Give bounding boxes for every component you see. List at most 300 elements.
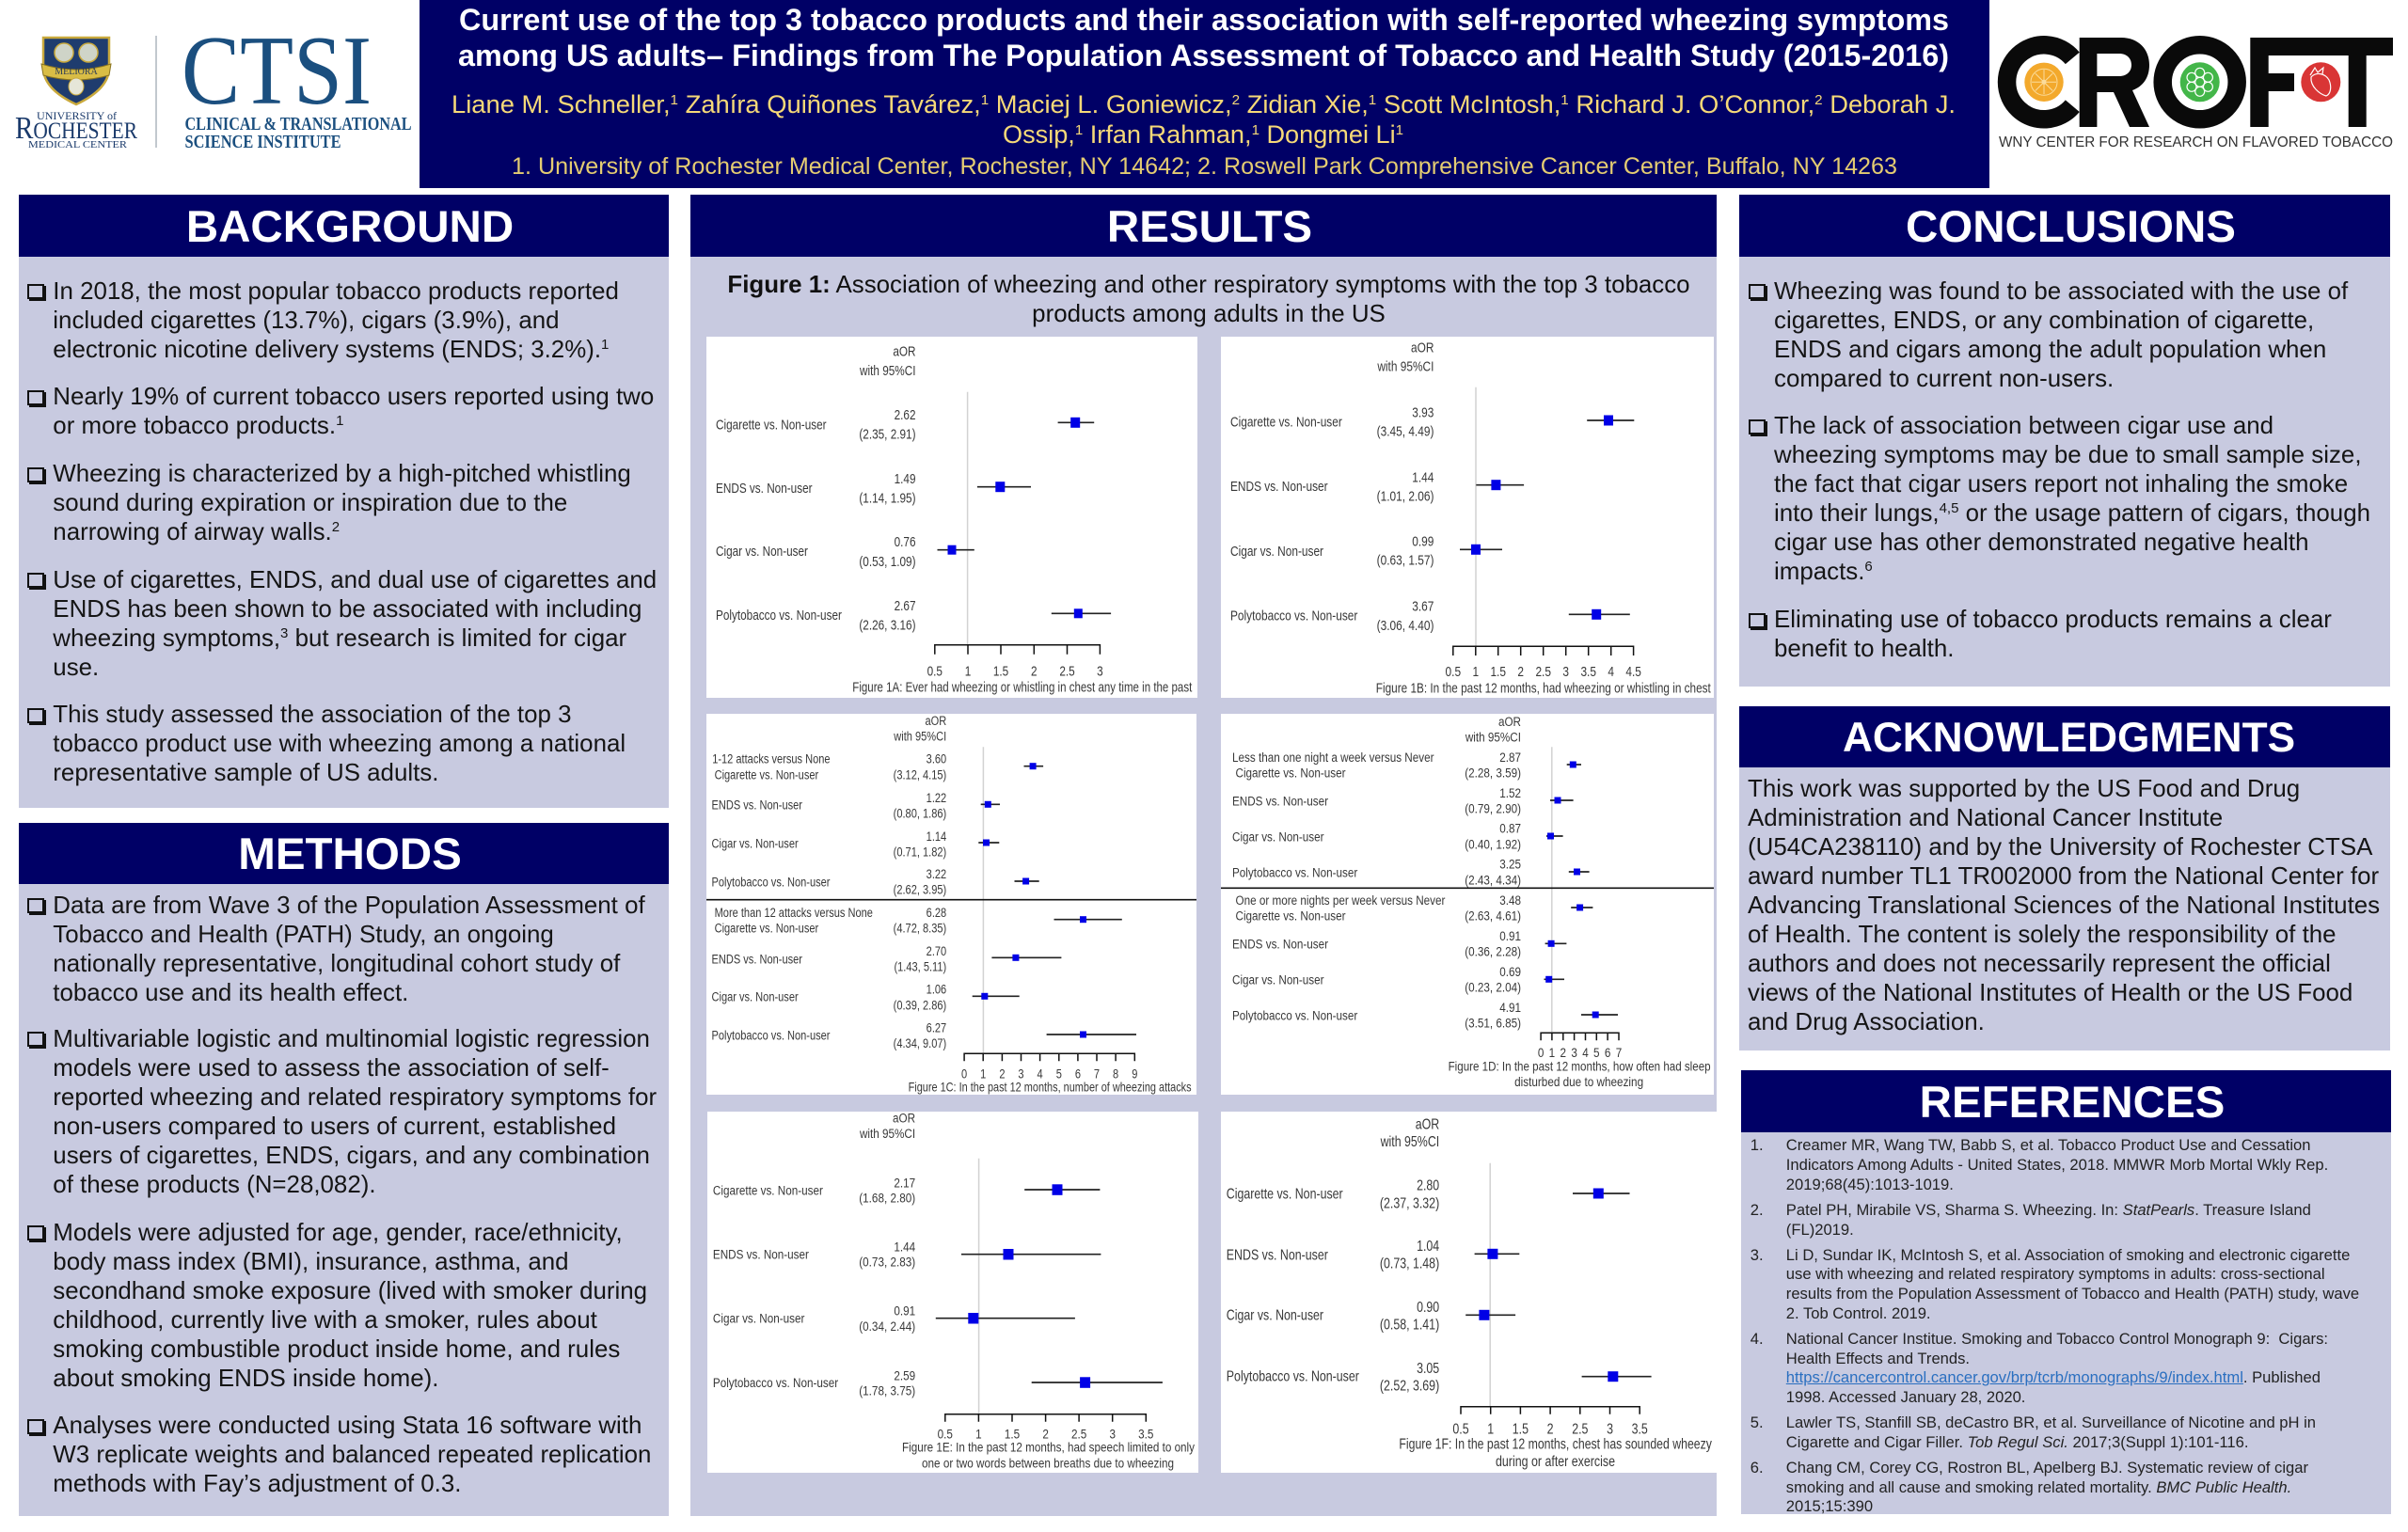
odds ratio values: (1.14, 1.95) xyxy=(859,490,916,506)
chart: figure 1A forest plot xyxy=(706,337,1197,698)
figure caption xyxy=(902,1440,1195,1470)
panel: references: 6. xyxy=(1751,1459,1764,1477)
odds ratio values: (2.28, 3.59) xyxy=(1465,765,1521,781)
text: methods bullet 3: Models were adjusted for age, gender, race/ethnicity, xyxy=(53,1220,623,1246)
x axis: 1 xyxy=(980,1066,986,1082)
odds ratio values: 2.62 xyxy=(895,407,916,422)
heading: conclusions xyxy=(1739,195,2390,257)
text: background bullet 2 xyxy=(27,384,654,439)
title xyxy=(458,3,1949,72)
x axis xyxy=(927,645,1103,679)
text: acknowledgments body: (U54CA238110) and by the University of Rochester CTSA xyxy=(1748,834,2372,861)
row labels: Polytobacco vs. Non-user xyxy=(711,1028,830,1043)
text: reference 4: 1998. Accessed January 28, 2020. xyxy=(1786,1388,2025,1406)
odds ratio values: (0.34, 2.44) xyxy=(859,1319,915,1334)
text: methods bullet 1: Tobacco and Health (PATH) Study, an ongoing xyxy=(53,922,554,948)
odds ratio values: (0.79, 2.90) xyxy=(1465,801,1521,816)
column header: aOR xyxy=(1416,1115,1439,1132)
text: figure 1 caption: Figure 1: Association of wheezing and other respiratory symptoms with the top 3 tobacco xyxy=(727,272,1690,298)
x axis: 7 xyxy=(1094,1066,1100,1082)
chart: figure 1F forest plot xyxy=(1221,1112,1718,1473)
text: CTSI wordmark: SCIENCE INSTITUTE xyxy=(184,132,341,152)
odds ratio values: 2.70 xyxy=(927,944,946,958)
row labels xyxy=(1230,414,1358,624)
column header xyxy=(859,343,916,378)
x axis: 3.5 xyxy=(1580,664,1596,679)
text: methods bullet 2: of these products (N=28,082). xyxy=(53,1172,376,1198)
column header: with 95%CI xyxy=(1376,358,1434,374)
heading: acknowledgments: ACKNOWLEDGMENTS xyxy=(1843,715,2295,761)
text: background bullet 5 xyxy=(27,702,626,786)
odds ratio values: 0.76 xyxy=(895,534,916,549)
row labels: Polytobacco vs. Non-user xyxy=(716,608,842,623)
x axis: 5 xyxy=(1056,1066,1062,1082)
row labels: ENDS vs. Non-user xyxy=(1230,479,1328,494)
x axis: 1 xyxy=(1487,1420,1494,1437)
x axis: 3 xyxy=(1607,1420,1613,1437)
x axis xyxy=(938,1414,1153,1442)
odds ratio values: (3.51, 6.85) xyxy=(1465,1016,1521,1031)
letter T xyxy=(2312,38,2393,127)
text: acknowledgments body: of Health. The content is solely the responsibility of the xyxy=(1748,922,2337,948)
row labels: ENDS vs. Non-user xyxy=(1232,937,1329,952)
column header xyxy=(859,1111,915,1141)
authors: Richard J. O’Connor, xyxy=(1569,90,1814,118)
text: background bullet 3: Wheezing is characterized by a high-pitched whistling xyxy=(53,461,631,487)
row labels: Cigarette vs. Non-user xyxy=(1236,908,1346,924)
text: acknowledgments body: This work was supported by the US Food and Drug xyxy=(1748,776,2300,802)
text: methods bullet 3: body mass index (BMI), insurance, asthma, and xyxy=(53,1249,569,1275)
odds ratio values: 1.49 xyxy=(895,471,916,486)
odds ratio values: (4.34, 9.07) xyxy=(894,1036,946,1050)
text: conclusions bullet 2: cigar use has other demonstrated negative health xyxy=(1774,529,2309,556)
row labels xyxy=(1227,1185,1359,1384)
text: reference 2: Patel PH, Mirabile VS, Sharma S. Wheezing. In: StatPearls. Treasure Island xyxy=(1786,1201,2311,1219)
row labels: More than 12 attacks versus None xyxy=(715,906,873,920)
reference line xyxy=(1489,1163,1491,1406)
row labels xyxy=(713,1182,839,1390)
odds ratio values: 3.48 xyxy=(1499,892,1521,908)
text: methods bullet 3: secondhand smoke exposure (lived with smoker during xyxy=(53,1278,647,1304)
row labels: Cigarette vs. Non-user xyxy=(713,1182,824,1198)
x axis: 0.5 xyxy=(1446,664,1461,679)
text: CTSI wordmark: CTSI xyxy=(182,15,372,125)
text: acknowledgments body: authors and does not necessarily represent the official xyxy=(1748,951,2331,977)
column header xyxy=(1376,340,1434,374)
x axis: 2 xyxy=(1560,1045,1566,1060)
x axis: 6 xyxy=(1605,1045,1610,1060)
logos: University of Rochester Medical Center and CTSI xyxy=(15,15,412,152)
estimates with confidence intervals xyxy=(973,763,1136,1038)
odds ratio values: (0.39, 2.86) xyxy=(894,998,946,1013)
authors: 2 xyxy=(1232,92,1240,108)
group divider xyxy=(1221,887,1714,889)
panel: results xyxy=(690,195,1717,1516)
odds ratio values: 3.67 xyxy=(1412,598,1434,614)
x axis: 2 xyxy=(1517,664,1524,679)
chart: figure 1D forest plot xyxy=(1221,714,1714,1095)
reference line xyxy=(978,1159,980,1414)
odds ratio values: (2.63, 4.61) xyxy=(1465,908,1521,924)
odds ratio values xyxy=(894,751,946,1050)
column header: with 95%CI xyxy=(859,1126,915,1141)
x axis: 2 xyxy=(1031,663,1038,679)
text: figure 1 caption xyxy=(727,272,1690,327)
estimates with confidence intervals xyxy=(937,418,1111,618)
odds ratio values: 1.04 xyxy=(1417,1238,1439,1254)
authors: Scott McIntosh, xyxy=(1376,90,1560,118)
text: background bullet 4: wheezing symptoms,3 but research is limited for cigar xyxy=(53,624,626,651)
text: background bullet 5: This study assessed the association of the top 3 xyxy=(53,702,572,728)
x axis xyxy=(1452,1407,1648,1437)
x axis: 0.5 xyxy=(927,663,943,679)
x axis: 1.5 xyxy=(1490,664,1506,679)
column header xyxy=(1380,1115,1439,1149)
text: background bullet 3 xyxy=(27,461,631,545)
authors: Zahíra Quiñones Tavárez, xyxy=(678,90,981,118)
chart: figure 1B forest plot xyxy=(1221,337,1714,698)
text: conclusions bullet 2: The lack of association between cigar use and xyxy=(1774,413,2273,439)
text: acknowledgments body: and Drug Association. xyxy=(1748,1009,1985,1035)
text: reference 3: 2. Tob Control. 2019. xyxy=(1786,1304,1931,1322)
x axis: 1 xyxy=(1549,1045,1555,1060)
panel: references: 1. xyxy=(1751,1136,1764,1154)
text: reference 6: Chang CM, Corey CG, Rostron BL, Apelberg BJ. Systematic review of cigar xyxy=(1786,1459,2308,1477)
authors: 1 xyxy=(981,92,989,108)
authors: 1 xyxy=(671,92,678,108)
odds ratio values: (0.73, 2.83) xyxy=(859,1255,915,1270)
text: acknowledgments body: Advancing Translational Sciences of the National Institutes xyxy=(1748,892,2380,919)
odds ratio values: 1.14 xyxy=(927,829,946,844)
odds ratio values: (0.73, 1.48) xyxy=(1380,1255,1439,1271)
x axis: 2.5 xyxy=(1071,1427,1086,1442)
icon: university shield: MELIORA xyxy=(55,67,99,77)
text: methods bullet 1 xyxy=(27,892,645,1006)
row labels: 1-12 attacks versus None xyxy=(712,751,831,766)
authors: Zidian Xie, xyxy=(1240,90,1369,118)
authors: 1 xyxy=(1396,122,1403,138)
authors xyxy=(452,90,1956,149)
heading: methods xyxy=(19,823,669,884)
text: figure 1 caption: products among adults in the US xyxy=(1032,301,1386,327)
text: background bullet 4 xyxy=(27,566,657,681)
text: reference 6: smoking and all cause and smoking related mortality. BMC Public Health. xyxy=(1786,1478,2291,1496)
row labels: ENDS vs. Non-user xyxy=(1232,794,1329,809)
authors: 1 xyxy=(1560,92,1569,108)
x axis: 6 xyxy=(1075,1066,1081,1082)
x axis: 1 xyxy=(975,1427,982,1442)
row labels xyxy=(716,417,842,623)
odds ratio values: (1.43, 5.11) xyxy=(894,959,946,974)
column header: aOR xyxy=(1498,714,1521,729)
figure caption xyxy=(1449,1059,1711,1089)
heading: references xyxy=(1741,1070,2391,1132)
text: conclusions bullet 2: into their lungs,4,5 or the usage pattern of cigars, though xyxy=(1774,500,2370,527)
text: background bullet 2: Nearly 19% of current tobacco users reported using two xyxy=(53,384,654,410)
odds ratio values: 1.06 xyxy=(927,982,946,997)
authors: Ossip, xyxy=(1003,120,1075,149)
row labels: Polytobacco vs. Non-user xyxy=(1230,608,1358,624)
row labels: Polytobacco vs. Non-user xyxy=(1227,1367,1359,1384)
text: acknowledgments body: award number TL1 TR002000 from the National Center for xyxy=(1748,863,2379,890)
text: methods bullet 3: childhood, currently live with a smoker, rules about xyxy=(53,1307,597,1334)
odds ratio values: (2.35, 2.91) xyxy=(859,426,916,442)
heading: conclusions: CONCLUSIONS xyxy=(1906,202,2236,252)
row labels: ENDS vs. Non-user xyxy=(1227,1246,1328,1263)
odds ratio values: 2.17 xyxy=(894,1175,915,1191)
figure caption xyxy=(1399,1437,1712,1470)
estimates with confidence intervals xyxy=(936,1184,1163,1388)
text: conclusions bullet 2: wheezing symptoms may be due to small sample size, xyxy=(1774,442,2362,468)
column header xyxy=(1465,714,1521,745)
letter F xyxy=(2250,38,2312,127)
text: University of Rochester Medical Center wordmark: UNIVERSITY of xyxy=(37,109,117,122)
text: reference 3: use with wheezing and related respiratory symptoms in adults: cross-sectional xyxy=(1786,1265,2325,1283)
title: among US adults– Findings from The Population Assessment of Tobacco and Health Study (2015-2016) xyxy=(458,39,1949,72)
authors: 1 xyxy=(1252,122,1259,138)
text: conclusions bullet 1: cigarettes, ENDS, or any combination of cigarette, xyxy=(1774,307,2314,333)
reference line xyxy=(1551,747,1553,1033)
odds ratio values: 1.44 xyxy=(894,1239,915,1255)
odds ratio values: (1.01, 2.06) xyxy=(1377,488,1434,504)
text: reference 4: Health Effects and Trends. xyxy=(1786,1350,1970,1367)
odds ratio values: (2.43, 4.34) xyxy=(1465,872,1521,888)
x axis: 1 xyxy=(1472,664,1479,679)
panel: background xyxy=(19,195,669,808)
text: reference 4: National Cancer Institue. Smoking and Tobacco Control Monograph 9: Cigars: xyxy=(1786,1330,2328,1348)
row labels: ENDS vs. Non-user xyxy=(711,952,802,967)
column header: aOR xyxy=(1411,340,1434,355)
row labels: Cigar vs. Non-user xyxy=(711,836,799,851)
text: University of Rochester Medical Center wordmark: ROCHESTER xyxy=(15,111,137,146)
text: methods bullet 2: models were used to assess the association of self- xyxy=(53,1055,610,1082)
text: University of Rochester Medical Center wordmark: MEDICAL CENTER xyxy=(28,139,128,150)
text: methods bullet 2: users of cigarettes, ENDS, cigars, and any combination xyxy=(53,1143,650,1169)
odds ratio values: 6.27 xyxy=(927,1020,946,1035)
odds ratio values: (1.78, 3.75) xyxy=(859,1383,915,1398)
reference line xyxy=(967,392,969,646)
x axis: 0.5 xyxy=(1452,1420,1469,1437)
text: reference 4 xyxy=(1751,1330,2328,1406)
row labels: Cigar vs. Non-user xyxy=(716,544,808,559)
odds ratio values: 0.99 xyxy=(1412,533,1434,549)
x axis: 3 xyxy=(1571,1045,1577,1060)
text: reference 5: Cigarette and Cigar Filler. Tob Regul Sci. 2017;3(Suppl 1):101-116. xyxy=(1786,1433,2248,1451)
authors: Maciej L. Goniewicz, xyxy=(989,90,1232,118)
text: methods bullet 1: nationally representative, longitudinal cohort study of xyxy=(53,951,620,977)
text: conclusions bullet 3 xyxy=(1749,607,2332,662)
row labels: Polytobacco vs. Non-user xyxy=(1232,1008,1358,1023)
x axis: 5 xyxy=(1593,1045,1600,1060)
text: conclusions bullet 2 xyxy=(1749,413,2370,585)
text: background bullet 1: included cigarettes (13.7%), cigars (3.9%), and xyxy=(53,307,560,333)
heading: acknowledgments xyxy=(1739,706,2390,767)
text: methods bullet 3: smoking combustible product inside home, and rules xyxy=(53,1336,620,1363)
x axis: 3.5 xyxy=(1632,1420,1648,1437)
column header: with 95%CI xyxy=(1465,729,1521,745)
text: conclusions bullet 1 xyxy=(1749,278,2348,391)
x axis: 1 xyxy=(965,663,971,679)
x axis: 1.5 xyxy=(1005,1427,1020,1442)
row labels: Cigarette vs. Non-user xyxy=(716,417,827,433)
text: methods bullet 2 xyxy=(27,1026,657,1198)
authors: Liane M. Schneller, xyxy=(452,90,668,118)
text: conclusions bullet 3: benefit to health. xyxy=(1774,636,1954,662)
column header: aOR xyxy=(893,343,916,359)
text: background bullet 4: use. xyxy=(53,655,99,681)
odds ratio values: 0.87 xyxy=(1499,821,1521,836)
x axis: 8 xyxy=(1113,1066,1118,1082)
odds ratio values: 3.93 xyxy=(1412,404,1434,420)
column header: with 95%CI xyxy=(859,363,916,378)
x axis: 9 xyxy=(1132,1066,1137,1082)
odds ratio values: (2.37, 3.32) xyxy=(1380,1194,1439,1211)
row labels: Cigar vs. Non-user xyxy=(713,1311,805,1326)
row labels: Less than one night a week versus Never xyxy=(1232,750,1434,765)
odds ratio values: (3.06, 4.40) xyxy=(1377,618,1434,633)
x axis: 2.5 xyxy=(1535,664,1551,679)
logo: CROFT xyxy=(1998,36,2393,150)
text: acknowledgments body xyxy=(1748,776,2380,1035)
x axis: 3 xyxy=(1097,663,1103,679)
x axis: 3 xyxy=(1018,1066,1024,1082)
odds ratio values: (0.63, 1.57) xyxy=(1377,552,1434,568)
letter O with green circle xyxy=(2162,45,2237,119)
text: background bullet 5: representative sample of US adults. xyxy=(53,760,438,786)
x axis: 0 xyxy=(1538,1045,1544,1060)
text: reference 1 xyxy=(1751,1136,2328,1193)
odds ratio values: 0.91 xyxy=(894,1303,915,1319)
icon: strawberry xyxy=(2299,60,2343,104)
x axis: 2 xyxy=(1042,1427,1049,1442)
text: conclusions bullet 1: compared to current non-users. xyxy=(1774,365,2114,391)
authors: 1 xyxy=(1369,92,1376,108)
heading: background: BACKGROUND xyxy=(186,202,514,252)
text: background bullet 1 xyxy=(27,278,619,363)
estimates with confidence intervals xyxy=(1460,416,1634,620)
x axis: 4 xyxy=(1608,664,1614,679)
odds ratio values: 1.52 xyxy=(1499,785,1521,800)
x axis xyxy=(961,1053,1137,1082)
header: title, authors and affiliations xyxy=(420,0,1989,188)
panel: references: 4. xyxy=(1751,1330,1764,1348)
x axis: 1.5 xyxy=(993,663,1008,679)
text: conclusions bullet 1: Wheezing was found to be associated with the use of xyxy=(1774,278,2348,305)
odds ratio values: 6.28 xyxy=(927,906,946,920)
text: background bullet 1: In 2018, the most popular tobacco products reported xyxy=(53,278,619,305)
chart: figure 1E forest plot xyxy=(707,1112,1198,1473)
text: reference 3: Li D, Sundar IK, McIntosh S, et al. Association of smoking and electronic cigarette xyxy=(1786,1246,2350,1264)
text: methods bullet 1: tobacco use and its health effect. xyxy=(53,980,408,1006)
text: CROFT tagline: WNY CENTER FOR RESEARCH ON FLAVORED TOBACCO xyxy=(1999,134,2393,150)
text: acknowledgments body: views of the National Institutes of Health or the US Food xyxy=(1748,980,2353,1006)
x axis xyxy=(1446,646,1641,679)
letter R xyxy=(2080,38,2149,127)
x axis xyxy=(1538,1033,1622,1060)
text: background bullet 2: or more tobacco products.1 xyxy=(53,413,343,439)
odds ratio values xyxy=(1465,750,1521,1031)
text: background bullet 4: ENDS has been shown to be associated with including xyxy=(53,596,642,623)
row labels: Polytobacco vs. Non-user xyxy=(1232,865,1358,880)
text: methods bullet 2: Multivariable logistic and multinomial logistic regression xyxy=(53,1026,650,1052)
odds ratio values: 0.69 xyxy=(1499,964,1521,979)
odds ratio values xyxy=(1377,404,1434,633)
x axis: 0 xyxy=(961,1066,967,1082)
x axis: 7 xyxy=(1616,1045,1622,1060)
odds ratio values: (0.53, 1.09) xyxy=(859,554,916,569)
reference line xyxy=(1475,387,1477,646)
heading: references: REFERENCES xyxy=(1920,1078,2225,1128)
text: reference 5: Lawler TS, Stanfill SB, deCastro BR, et al. Surveillance of Nicotine and pH in xyxy=(1786,1414,2316,1431)
row labels: Cigarette vs. Non-user xyxy=(715,767,818,782)
panel: conclusions xyxy=(1739,195,2390,687)
x axis: 4.5 xyxy=(1625,664,1641,679)
odds ratio values: (3.12, 4.15) xyxy=(894,767,946,782)
odds ratio values: (2.26, 3.16) xyxy=(859,617,916,633)
odds ratio values: (1.68, 2.80) xyxy=(859,1191,915,1206)
row labels xyxy=(1232,750,1446,1023)
column header: with 95%CI xyxy=(1380,1133,1439,1149)
odds ratio values: (0.23, 2.04) xyxy=(1465,980,1521,995)
x axis: 3 xyxy=(1109,1427,1116,1442)
odds ratio values: 3.25 xyxy=(1499,857,1521,872)
odds ratio values: 2.67 xyxy=(895,598,916,613)
odds ratio values: (0.71, 1.82) xyxy=(894,845,946,860)
row labels: Cigar vs. Non-user xyxy=(1232,829,1324,845)
odds ratio values: 3.60 xyxy=(927,751,946,766)
x axis: 2.5 xyxy=(1572,1420,1589,1437)
text: reference 4: https://cancercontrol.cancer.gov/brp/tcrb/monographs/9/index.html. Published xyxy=(1786,1368,2321,1386)
odds ratio values: 2.87 xyxy=(1499,750,1521,765)
x axis: 3 xyxy=(1562,664,1569,679)
row labels: Cigar vs. Non-user xyxy=(1227,1306,1323,1323)
odds ratio values: 0.90 xyxy=(1417,1299,1439,1315)
odds ratio values: (0.58, 1.41) xyxy=(1380,1316,1439,1333)
panel: acknowledgments xyxy=(1739,706,2390,1050)
text: background bullet 1: electronic nicotine delivery systems (ENDS; 3.2%).1 xyxy=(53,337,609,363)
text: reference 6 xyxy=(1751,1459,2308,1515)
text: methods bullet 3: about smoking ENDS inside home). xyxy=(53,1366,438,1392)
text: reference 1: 2019;68(45):1013-1019. xyxy=(1786,1176,1954,1193)
panel: references xyxy=(1741,1070,2391,1514)
authors: 1 xyxy=(1075,122,1083,138)
authors: Dongmei Li xyxy=(1259,120,1396,149)
text: reference 2 xyxy=(1751,1201,2311,1239)
text: conclusions bullet 2: impacts.6 xyxy=(1774,559,1873,585)
row labels: Cigar vs. Non-user xyxy=(1232,972,1324,987)
column header: aOR xyxy=(925,714,946,728)
text: reference 1: Indicators Among Adults - United States, 2018. MMWR Morb Mortal Wkly Rep. xyxy=(1786,1156,2328,1174)
title: Current use of the top 3 tobacco products and their association with self-reported wheezing symptoms xyxy=(459,3,1949,37)
heading: results xyxy=(690,195,1717,257)
odds ratio values: (2.52, 3.69) xyxy=(1380,1377,1439,1394)
odds ratio values: 3.22 xyxy=(927,867,946,881)
row labels: One or more nights per week versus Never xyxy=(1236,892,1446,908)
affiliations: 1. University of Rochester Medical Center, Rochester, NY 14642; 2. Roswell Park Comprehensive Cancer Center, Buffalo, NY 14263 xyxy=(512,153,1897,180)
column header xyxy=(893,714,946,744)
text: methods bullet 4: methods with Fay’s adjustment of 0.3. xyxy=(53,1471,461,1497)
text: background bullet 3: narrowing of airway walls.2 xyxy=(53,519,340,545)
row labels: Cigarette vs. Non-user xyxy=(1227,1185,1343,1202)
reference line xyxy=(982,747,984,1053)
row labels: Cigarette vs. Non-user xyxy=(1236,765,1346,781)
odds ratio values: (3.45, 4.49) xyxy=(1377,423,1434,439)
panel: references: 5. xyxy=(1751,1414,1764,1431)
panel: references: 3. xyxy=(1751,1246,1764,1264)
icon: university shield xyxy=(41,38,111,104)
chart: figure 1C forest plot xyxy=(706,714,1196,1095)
authors: 2 xyxy=(1814,92,1823,108)
